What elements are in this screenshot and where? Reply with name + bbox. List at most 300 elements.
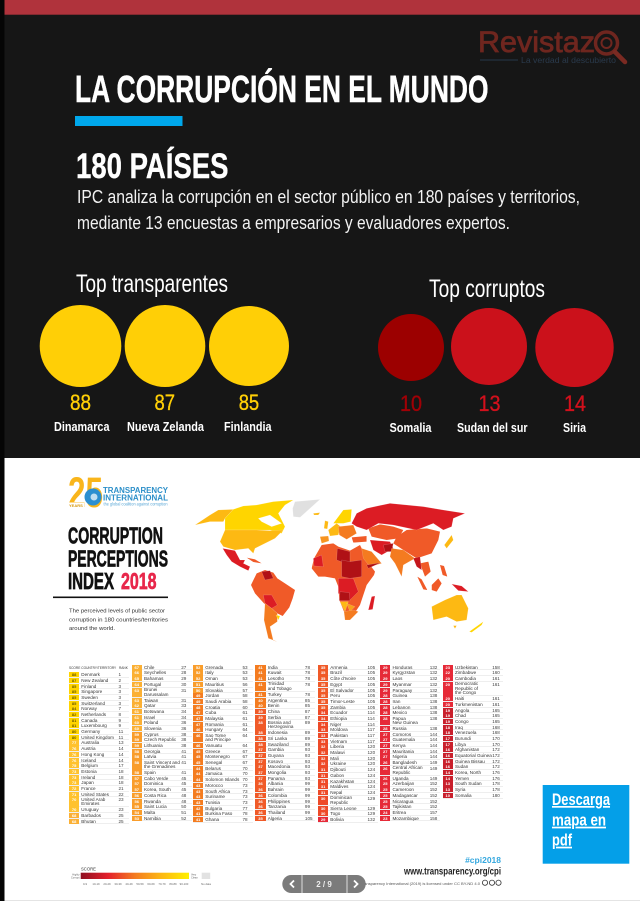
table column 3: 61 (242, 722, 248, 727)
table column 1: Canada (81, 718, 97, 723)
table column 7: Chad (455, 713, 466, 718)
table column 3: 58 (242, 699, 248, 704)
table column 1: 18 (118, 775, 124, 780)
table column 4: Gambia (268, 747, 284, 752)
table column 6: Cameroon (392, 787, 414, 792)
circles: transparent countries (40, 305, 289, 387)
table column 3: Grenada (205, 665, 223, 670)
table column 7: Zimbabwe (455, 670, 476, 675)
table column 7: 172 (492, 764, 500, 769)
table column 5: Republic (330, 800, 348, 805)
table column 5: El Salvador (330, 688, 354, 693)
table column 3: 47 (196, 710, 200, 715)
table column 3: Montenegro (205, 754, 230, 759)
table column 1: 3 (118, 689, 121, 694)
table column 7: the Congo (455, 690, 476, 695)
table column 5: 29 (321, 817, 325, 822)
table column 6: 152 (430, 799, 437, 804)
Russia (352, 503, 465, 530)
table column 7: 19 (446, 708, 450, 713)
table column 7: 13 (446, 781, 450, 786)
table column 7: 16 (446, 753, 450, 758)
table column 6: 28 (383, 699, 388, 704)
scores: corrupt countries: 14 (564, 391, 586, 416)
Canada (225, 500, 293, 533)
table column 6: 158 (430, 816, 437, 821)
table column 4: Lesotho (268, 676, 284, 681)
table column 4: Albania (268, 781, 283, 786)
table column 5: 114 (368, 716, 375, 721)
table column 3: 60 (242, 705, 248, 710)
table column 2 (132, 665, 192, 821)
table column 7: 172 (492, 753, 500, 758)
table column 4: 37 (258, 776, 263, 781)
table column 4: 87 (305, 715, 310, 720)
table column 3: 51 (196, 682, 200, 687)
table column 2: 28 (181, 670, 186, 675)
pagination control: 2 / 9 (316, 880, 332, 889)
table column 5: 35 (321, 699, 325, 704)
table column 3: 44 (196, 766, 200, 771)
table column 1: Ireland (81, 775, 95, 780)
table column 2: 45 (181, 781, 186, 786)
table column 2: Brunei (144, 687, 157, 692)
table column 5: Moldova (330, 727, 348, 732)
scores: corrupt countries: 13 (478, 391, 500, 416)
table column 5: 124 (368, 790, 375, 795)
table column 1: United States (81, 792, 109, 797)
table column 6: Myanmar (392, 682, 412, 687)
table column 7: Libya (455, 742, 466, 747)
Angola (339, 592, 350, 601)
Namibia (340, 602, 348, 612)
table column 1: 73 (72, 775, 76, 780)
table column 5: 30 (321, 811, 325, 816)
table column 3: Senegal (205, 760, 222, 765)
names: corrupt countries: Sudan del sur (457, 420, 528, 435)
table column 6: Iran (392, 699, 400, 704)
names: corrupt countries: Somalia (390, 420, 432, 435)
USA (220, 530, 283, 553)
table column 3: 48 (196, 705, 200, 710)
table column 7: Congo (455, 719, 469, 724)
table column 5: 120 (368, 761, 375, 766)
table column 3: 64 (242, 733, 248, 738)
table column 3: 57 (242, 688, 248, 693)
table column 4: 99 (305, 787, 310, 792)
table column 2: 31 (181, 688, 186, 693)
table column 7: 17 (446, 736, 450, 741)
table column 4: 38 (258, 730, 263, 735)
table column 5: 117 (368, 739, 375, 744)
download button: pdf (552, 831, 572, 850)
table column 1: 68 (72, 813, 76, 818)
table column 7: 17 (446, 742, 450, 747)
table column 5: Niger (330, 722, 341, 727)
table column 7: 165 (492, 719, 500, 724)
table column 2: Cyprus (144, 732, 159, 737)
table column 7: 161 (492, 676, 500, 681)
table column 2: 60 (135, 726, 139, 731)
icon: previous arrow (290, 880, 294, 888)
table column 2: Israel (144, 715, 155, 720)
table column 5: 117 (368, 727, 375, 732)
table column 4: 99 (305, 793, 310, 798)
table column 6: 25 (383, 781, 388, 786)
table column 7: Somalia (455, 793, 472, 798)
map subtitle (69, 609, 168, 632)
table column 6: 144 (430, 749, 437, 754)
table column 1: Iceland (81, 758, 96, 762)
table column 1: Barbados (81, 813, 101, 818)
table column 6: 23 (383, 816, 388, 821)
table column 4: 38 (258, 742, 263, 747)
table column 5: Côte d'Ivoire (330, 676, 356, 681)
table column 3: 73 (242, 800, 248, 805)
table column 5: 30 (321, 796, 325, 801)
table column 4: Sri Lanka (268, 736, 287, 741)
table column 7: Uzbekistan (455, 665, 478, 670)
table column 5: 30 (321, 806, 325, 811)
table column 2: the Grenadines (144, 764, 175, 769)
table column 3: Croatia (205, 705, 220, 710)
table column 7: 160 (492, 670, 500, 675)
table column 4: 78 (305, 676, 310, 681)
table column 4 (255, 665, 315, 821)
table column 6: 27 (383, 754, 388, 759)
Western Europe (328, 523, 341, 536)
table column 3: 52 (196, 670, 200, 675)
heading: 180 países: 180 PAÍSES (76, 146, 228, 186)
table column 3: Cuba (205, 710, 216, 715)
table column 1: 7 (118, 706, 121, 711)
table column 4: 38 (258, 736, 263, 741)
table column 6: Nicaragua (392, 799, 413, 804)
table column 7: 20 (446, 696, 450, 701)
table column 6: 138 (430, 693, 437, 698)
table column 5: 105 (368, 665, 375, 670)
table column 5: 117 (368, 733, 375, 738)
table column 3: 44 (196, 777, 200, 782)
world map (195, 499, 483, 642)
intro paragraph (77, 187, 580, 233)
panel: top corruptos (378, 275, 614, 435)
table column 5: 124 (368, 767, 375, 772)
table column 6: 138 (430, 716, 437, 721)
table column 7: 168 (492, 725, 500, 730)
table column 6: Russia (392, 726, 407, 731)
table column 7: Democratic (455, 681, 478, 686)
table column 5: Brazil (330, 670, 342, 675)
table column 3: Jordan (205, 693, 219, 698)
table column 5: 35 (321, 670, 325, 675)
scores: transparent countries: 85 (239, 390, 259, 415)
table column 1: Uruguay (81, 807, 99, 812)
table column 6: 138 (430, 726, 437, 731)
panel: top transparentes (40, 270, 289, 434)
table column 5: 124 (368, 779, 375, 784)
table column 5: 105 (368, 676, 375, 681)
table column 1: 73 (72, 780, 76, 785)
Central Asia (368, 524, 404, 540)
table column 2: 38 (181, 737, 186, 742)
table column 4: Argentina (268, 698, 287, 703)
table column 2: 33 (181, 703, 186, 708)
table column 5: 114 (368, 710, 375, 715)
heading: top corruptos: Top corruptos (429, 275, 545, 303)
Iran (370, 540, 393, 555)
table column 2: 50 (181, 804, 186, 809)
table column 3: Belarus (205, 766, 221, 771)
table column 5: Peru (330, 693, 340, 698)
table column 5: 33 (321, 733, 325, 738)
legend: score scale (71, 866, 211, 886)
table column 3: Jamaica (205, 771, 222, 776)
table column 5: Gabon (330, 773, 344, 778)
table column 3: 44 (196, 771, 200, 776)
table column 2: 57 (135, 781, 139, 786)
table column 6: 138 (430, 705, 437, 710)
table column 7: 161 (492, 682, 500, 687)
table column 4: 41 (258, 665, 263, 670)
world map base land (246, 524, 448, 616)
table column 6: Central African (392, 765, 423, 770)
table column 4: 36 (258, 781, 263, 786)
table column 5: 120 (368, 750, 375, 755)
table column 6: Laos (392, 676, 402, 681)
table column 7: Burundi (455, 736, 471, 741)
table column 4: Serbia (268, 715, 281, 720)
table column 6: Republic (392, 770, 410, 775)
table column 3: 53 (242, 670, 248, 675)
table column 2: 41 (181, 770, 186, 775)
table column 4: Colombia (268, 793, 287, 798)
table column 6: Lebanon (392, 705, 410, 710)
table column 3: Bulgaria (205, 806, 222, 811)
table column 1: Belgium (81, 763, 98, 768)
table column 3: 58 (242, 693, 248, 698)
table column 1: 25 (118, 813, 124, 818)
Africa (312, 543, 375, 613)
table column 2: Qatar (144, 703, 155, 708)
table column 3: Ghana (205, 817, 219, 822)
table column 7: Iraq (455, 725, 463, 730)
table column 3: 43 (196, 789, 200, 794)
table column 5: 35 (321, 688, 325, 693)
table column 7: 20 (446, 676, 450, 681)
table column 4: 78 (305, 692, 310, 697)
Venezuela (262, 571, 273, 580)
Eastern Europe (338, 525, 357, 539)
table column 5: 129 (368, 796, 375, 801)
legend: score scale: 20-29 (103, 882, 111, 886)
table column 5: Togo (330, 811, 340, 816)
New Zealand (469, 622, 483, 632)
table column 2: 52 (181, 816, 186, 821)
table column 1: 2 (118, 678, 121, 683)
table column 3: 47 (196, 722, 200, 727)
table column 7: 20 (446, 682, 450, 687)
table column 6: 149 (430, 760, 437, 765)
table column 4: 99 (305, 799, 310, 804)
table column 2: Bahamas (144, 676, 163, 681)
table column 1: Switzerland (81, 701, 105, 706)
table column 5: Egypt (330, 682, 342, 687)
table column 7: Guinea Bissau (455, 759, 485, 764)
table column 2: 41 (181, 749, 186, 754)
table column 2: 38 (181, 732, 186, 737)
table column 4: Kuwait (268, 670, 281, 675)
Mexico and Central America (223, 548, 250, 571)
table column 6: Azerbaijan (392, 781, 414, 786)
table column 1 (69, 672, 129, 824)
table column 7: Sudan (455, 764, 468, 769)
table column 6: 25 (383, 799, 388, 804)
Southeast Asia (420, 562, 431, 576)
table column 1: 23 (118, 807, 124, 812)
West Africa red (313, 555, 323, 567)
table column 2: Saint Vincent and (144, 760, 180, 765)
Spain (320, 536, 329, 543)
table column 7: Equatorial Guinea (455, 753, 492, 758)
table column 4: 36 (258, 799, 263, 804)
table column 3: 64 (242, 743, 248, 748)
Saudi Arabia (362, 548, 382, 567)
table column 6: 28 (383, 693, 388, 698)
Bolivia (263, 595, 277, 608)
table column 5: 132 (368, 817, 375, 822)
table column 5: 114 (368, 722, 375, 727)
table column 1: Hong Kong (81, 752, 104, 757)
table column 1: 81 (72, 718, 76, 723)
table column 4: 37 (258, 753, 263, 758)
table column 4: 40 (258, 703, 263, 708)
table column 4: 85 (305, 698, 310, 703)
table column 3: Sao Tome (205, 733, 226, 738)
heading: Corruption Perceptions Index 2018 (68, 522, 168, 594)
table column 5: 35 (321, 676, 325, 681)
table column 7: 158 (492, 665, 500, 670)
table column 7: Cambodia (455, 676, 476, 681)
table column 6: 132 (430, 676, 437, 681)
Australia (432, 595, 468, 622)
table column 6: 28 (383, 716, 388, 721)
table column 3: Italy (205, 670, 214, 675)
logo: Transparency International: YEARS (69, 503, 83, 508)
table column 4: 89 (305, 720, 310, 725)
table column 4: 40 (258, 698, 263, 703)
table column 4: 37 (258, 770, 263, 775)
circles: corrupt countries (378, 308, 614, 387)
table column 3: 47 (196, 716, 200, 721)
table column 1: Australia (81, 740, 99, 745)
table column 4: Panama (268, 776, 285, 781)
table column 4: 78 (305, 665, 310, 670)
table column 4: 93 (305, 770, 310, 775)
table column 7: 19 (446, 719, 450, 724)
table column 5: 34 (321, 716, 325, 721)
table column 1: 76 (72, 758, 76, 762)
download button (543, 785, 629, 864)
table column 1: Japan (81, 780, 94, 785)
logo: Transparency International: 25 (68, 469, 103, 517)
heading: top transparentes: Top transparentes (76, 270, 228, 298)
table column 6: Madagascar (392, 793, 418, 798)
table column 1: 25 (118, 819, 124, 824)
Alaska (195, 509, 233, 525)
table column 2: Slovenia (144, 726, 162, 731)
table column 1: 68 (72, 819, 76, 824)
table column 2: 61 (135, 709, 139, 714)
table column 6: 144 (430, 754, 437, 759)
scores: transparent countries: 88 (70, 390, 91, 415)
names: corrupt countries (390, 420, 587, 435)
table column 5: Djibouti (330, 767, 346, 772)
table column 3: 73 (242, 783, 248, 788)
table column 4: 99 (305, 804, 310, 809)
table column 4: 99 (305, 810, 310, 815)
table column 6: 29 (383, 682, 388, 687)
table column 6: 157 (430, 810, 437, 815)
table column 6: 26 (383, 766, 388, 771)
South Africa (344, 610, 358, 620)
table column 6: Paraguay (392, 688, 412, 693)
table column 5: Ecuador (330, 710, 347, 715)
table column 6: 28 (383, 710, 388, 715)
table column 2: 61 (135, 715, 139, 720)
table column 3: 42 (196, 806, 200, 811)
table column 4: 38 (258, 720, 263, 725)
table column 6: 138 (430, 710, 437, 715)
table column 5: 31 (321, 779, 325, 784)
licence line: Image © Transparency International (2019) is licensed under CC BY-ND 4.0 (344, 882, 480, 886)
table column 2: 63 (135, 698, 139, 703)
table column 3: Malaysia (205, 716, 223, 721)
Borneo (432, 578, 442, 592)
table column 7: 168 (492, 730, 500, 735)
table column 4: Herzegovina (268, 724, 293, 729)
Turkey (352, 536, 367, 543)
table column 2: 58 (135, 749, 139, 754)
table column 5: 105 (368, 682, 375, 687)
table column 5: 32 (321, 750, 325, 755)
table column 5: 34 (321, 710, 325, 715)
table column 4: 89 (305, 736, 310, 741)
table column 2: 41 (181, 754, 186, 759)
table column 2: 45 (181, 787, 186, 792)
table column 2: 53 (135, 816, 139, 821)
table column 1: 13 (118, 740, 124, 745)
table column 2: Darussalam (144, 692, 168, 697)
Myanmar (413, 557, 422, 570)
table column 7: 165 (492, 713, 500, 718)
table column 3: 49 (196, 693, 200, 698)
table column 5: Timor-Leste (330, 699, 355, 704)
table column 6: 149 (430, 766, 437, 771)
table column 1: 14 (118, 752, 124, 757)
table column 1: 21 (118, 786, 124, 791)
table column 1: 14 (118, 746, 124, 751)
table column 4: 41 (258, 682, 263, 687)
table column 2: Malta (144, 810, 155, 815)
table column 3: 70 (242, 771, 248, 776)
table column 3: 78 (242, 811, 248, 816)
table column 5 (318, 665, 378, 823)
South America (251, 570, 295, 616)
table column 4: 36 (258, 810, 263, 815)
table column 3: Suriname (205, 794, 225, 799)
legend: score scale: 50-59 (136, 882, 144, 886)
